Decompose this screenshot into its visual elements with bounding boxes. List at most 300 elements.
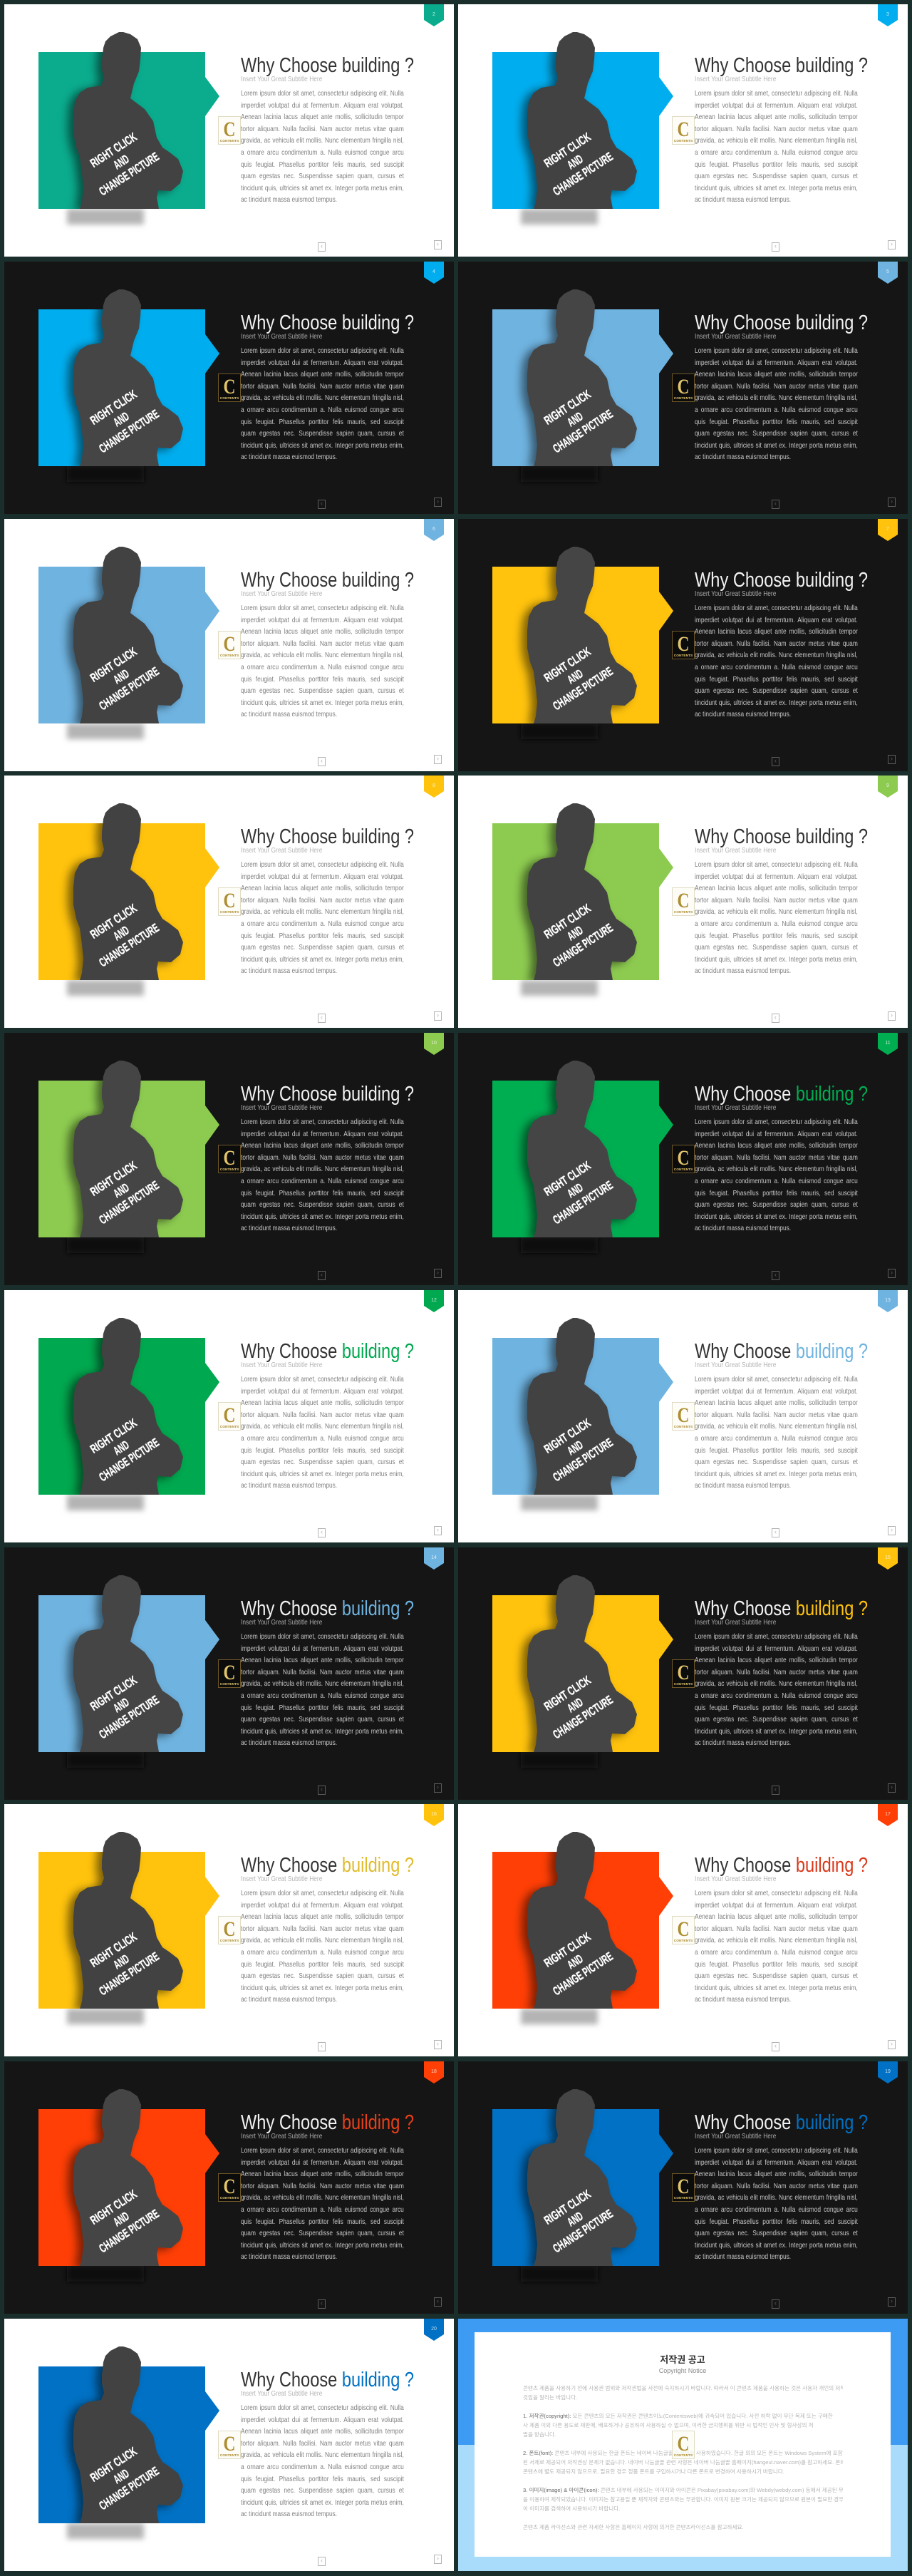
next button <box>888 240 896 249</box>
body text: Lorem ipsum dolor sit amet, consectetur adipiscing elit. Nulla <box>241 2404 404 2412</box>
image placeholder <box>492 803 673 999</box>
page tab <box>878 1290 898 1312</box>
page tab <box>424 1547 444 1570</box>
body text: ac tincidunt massa euismod tempus. <box>695 453 791 461</box>
image placeholder <box>492 1832 673 2027</box>
notice subheading: Copyright Notice <box>659 2367 706 2374</box>
logo: CONTENTS <box>674 911 693 915</box>
logo <box>672 1402 695 1431</box>
image placeholder: RIGHT CLICK <box>88 901 140 942</box>
logo: CONTENTS <box>674 1683 693 1686</box>
notice text <box>523 2384 843 2533</box>
next button <box>888 1526 896 1535</box>
body text: quis feugiat. Phasellus porttitor felis mauris, sed suscipit <box>695 1704 858 1712</box>
panel: slide 17 <box>458 1804 908 2056</box>
body text: gravida, ac vehicula elit mollis. Nunc elementum fringilla nisl, <box>695 1165 858 1173</box>
next button: › <box>437 2555 439 2562</box>
previous button: ‹ <box>774 1528 777 1535</box>
subtitle: Insert Your Great Subtitle Here <box>695 1875 776 1883</box>
image placeholder: AND <box>111 1438 132 1458</box>
body text: tortor aliquam. Nulla facilisi. Nam auctor metus vitae quam <box>241 1669 404 1676</box>
body text <box>241 90 404 204</box>
subtitle: Insert Your Great Subtitle Here <box>241 2390 322 2398</box>
image placeholder <box>38 1061 219 1254</box>
body text: gravida, ac vehicula elit mollis. Nunc elementum fringilla nisl, <box>241 137 404 145</box>
body text: quis feugiat. Phasellus porttitor felis mauris, sed suscipit <box>241 2475 404 2483</box>
previous button: ‹ <box>774 500 777 507</box>
image placeholder <box>38 1318 219 1514</box>
next button: › <box>437 755 439 762</box>
next button: › <box>437 1783 439 1791</box>
next button: › <box>437 1269 439 1276</box>
logo: C <box>678 889 689 912</box>
logo: CONTENTS <box>220 1426 239 1429</box>
logo <box>672 1916 695 1944</box>
page tab: 16 <box>431 1812 437 1817</box>
notice text: 2. 폰트(font): 콘텐츠 내부에 사용되는 한글 폰트는 네이버 나눔글꼴과 서체를 사용하였습니다. 한글 외의 모든 폰트는 Windows System에 포함 <box>523 2450 843 2456</box>
page tab: 12 <box>431 1298 437 1303</box>
title: Why Choose building ? <box>241 825 414 848</box>
body text: quis feugiat. Phasellus porttitor felis mauris, sed suscipit <box>695 418 858 426</box>
notice text: 콘텐츠 제품 라이선스와 관련 자세한 사항은 홈페이지 사항에 의거한 콘텐츠라이선스를 참고하세요. <box>523 2524 744 2530</box>
panel: slide 19 <box>458 2061 908 2314</box>
body text: Aenean lacinia lacus aliquet ante mollis, sollicitudin tempor <box>695 113 858 121</box>
title: Why Choose building ? <box>241 1597 414 1620</box>
body text: imperdiet volutpat dui at fermentum. Aliquam erat volutpat. <box>695 1902 858 1910</box>
logo: C <box>224 2175 235 2198</box>
body text: a ornare arcu condimentum a. Nulla euismod congue arcu <box>241 920 404 928</box>
body text: quam egestas nec. Suspendisse sapien quam, cursus et <box>241 1201 404 1209</box>
body text: gravida, ac vehicula elit mollis. Nunc elementum fringilla nisl, <box>241 394 404 402</box>
body text: quam egestas nec. Suspendisse sapien quam, cursus et <box>695 1972 858 1980</box>
body text: quam egestas nec. Suspendisse sapien quam, cursus et <box>241 687 404 695</box>
body text: tincidunt quis, ultricies sit amet ex. Integer porta metus enim, <box>241 2499 404 2507</box>
body text <box>241 1376 404 1490</box>
previous button: ‹ <box>321 242 323 249</box>
title: Why Choose building ? <box>695 54 868 77</box>
body text: quam egestas nec. Suspendisse sapien quam, cursus et <box>241 1972 404 1980</box>
image placeholder: RIGHT CLICK <box>542 901 594 942</box>
image placeholder: RIGHT CLICK <box>542 1930 594 1970</box>
page tab: 3 <box>886 12 889 17</box>
image placeholder: CHANGE PICTURE <box>97 1949 162 1998</box>
body text: Aenean lacinia lacus aliquet ante mollis, sollicitudin tempor <box>695 628 858 636</box>
page tab <box>424 2319 444 2341</box>
image placeholder: CHANGE PICTURE <box>97 1693 162 1741</box>
body text <box>695 1118 858 1232</box>
body text: Lorem ipsum dolor sit amet, consectetur adipiscing elit. Nulla <box>695 90 858 98</box>
page tab <box>878 1547 898 1570</box>
previous button: ‹ <box>774 242 777 249</box>
body text: quam egestas nec. Suspendisse sapien quam, cursus et <box>241 172 404 180</box>
lower background band <box>458 2445 908 2571</box>
body text: ac tincidunt massa euismod tempus. <box>695 967 791 975</box>
body text: a ornare arcu condimentum a. Nulla euismod congue arcu <box>241 1949 404 1957</box>
body text: ac tincidunt massa euismod tempus. <box>241 1482 337 1490</box>
body text: Lorem ipsum dolor sit amet, consectetur adipiscing elit. Nulla <box>695 1118 858 1126</box>
body text: tortor aliquam. Nulla facilisi. Nam auctor metus vitae quam <box>695 2183 858 2190</box>
body text <box>695 2147 858 2261</box>
title: Why Choose building ? <box>241 1854 414 1877</box>
next button <box>434 1011 442 1021</box>
image placeholder <box>38 803 219 999</box>
notice text: 콘텐츠에 별도 제공되지 않으므로, 필요한 경우 정품 폰트를 구입하시거나 다른 폰트로 변경하여 사용하시기 바랍니다. <box>523 2468 784 2475</box>
page tab: 9 <box>886 783 889 788</box>
body text: Lorem ipsum dolor sit amet, consectetur adipiscing elit. Nulla <box>695 1890 858 1897</box>
logo: CONTENTS <box>220 1168 239 1172</box>
body text: tincidunt quis, ultricies sit amet ex. Integer porta metus enim, <box>695 185 858 192</box>
logo <box>672 631 695 659</box>
panel: slide 18 <box>4 2061 454 2314</box>
body text: gravida, ac vehicula elit mollis. Nunc elementum fringilla nisl, <box>695 651 858 659</box>
page tab: 4 <box>432 269 435 274</box>
image placeholder: AND <box>111 409 132 429</box>
body text: tortor aliquam. Nulla facilisi. Nam auctor metus vitae quam <box>241 640 404 648</box>
body text: tortor aliquam. Nulla facilisi. Nam auctor metus vitae quam <box>695 1154 858 1162</box>
body text <box>241 1118 404 1232</box>
previous button: ‹ <box>321 500 323 507</box>
body text: quis feugiat. Phasellus porttitor felis mauris, sed suscipit <box>695 161 858 169</box>
page tab <box>878 2061 898 2083</box>
previous button: ‹ <box>774 1786 777 1793</box>
previous button <box>318 1528 326 1537</box>
title: Why Choose building ? <box>695 1083 868 1106</box>
previous button: ‹ <box>321 1786 323 1793</box>
page tab <box>424 519 444 541</box>
body text: quam egestas nec. Suspendisse sapien quam, cursus et <box>695 2230 858 2237</box>
body text: gravida, ac vehicula elit mollis. Nunc elementum fringilla nisl, <box>241 2451 404 2459</box>
body text: Aenean lacinia lacus aliquet ante mollis, sollicitudin tempor <box>695 1399 858 1407</box>
page tab <box>878 519 898 541</box>
image placeholder <box>492 32 673 228</box>
previous button <box>772 1014 779 1023</box>
body text: tincidunt quis, ultricies sit amet ex. Integer porta metus enim, <box>695 442 858 450</box>
body text: tortor aliquam. Nulla facilisi. Nam auctor metus vitae quam <box>695 1411 858 1419</box>
title: Why Choose building ? <box>695 1597 868 1620</box>
body text: a ornare arcu condimentum a. Nulla euismod congue arcu <box>695 920 858 928</box>
panel: slide 4 <box>4 262 454 514</box>
page tab: 20 <box>431 2327 437 2332</box>
body text: tincidunt quis, ultricies sit amet ex. Integer porta metus enim, <box>241 699 404 707</box>
body text: tincidunt quis, ultricies sit amet ex. Integer porta metus enim, <box>241 1213 404 1221</box>
image placeholder: AND <box>565 2209 586 2229</box>
image placeholder: AND <box>565 1180 586 1200</box>
body text: imperdiet volutpat dui at fermentum. Aliquam erat volutpat. <box>241 617 404 624</box>
page tab <box>424 4 444 26</box>
subtitle: Insert Your Great Subtitle Here <box>241 333 322 341</box>
body text: tincidunt quis, ultricies sit amet ex. Integer porta metus enim, <box>695 1470 858 1478</box>
body text: gravida, ac vehicula elit mollis. Nunc elementum fringilla nisl, <box>241 908 404 916</box>
next button <box>434 2297 442 2307</box>
image placeholder: CHANGE PICTURE <box>97 1178 162 1227</box>
previous button: ‹ <box>321 2042 323 2049</box>
body text: gravida, ac vehicula elit mollis. Nunc elementum fringilla nisl, <box>695 1423 858 1431</box>
previous button <box>318 2042 326 2051</box>
previous button <box>318 242 326 252</box>
body text: a ornare arcu condimentum a. Nulla euismod congue arcu <box>695 1435 858 1443</box>
image placeholder: CHANGE PICTURE <box>551 921 616 969</box>
body text: Lorem ipsum dolor sit amet, consectetur adipiscing elit. Nulla <box>241 90 404 98</box>
image placeholder: CHANGE PICTURE <box>97 150 162 198</box>
image placeholder: CHANGE PICTURE <box>97 664 162 713</box>
body text: tincidunt quis, ultricies sit amet ex. Integer porta metus enim, <box>241 442 404 450</box>
body text: gravida, ac vehicula elit mollis. Nunc elementum fringilla nisl, <box>241 2194 404 2202</box>
title: Why Choose building ? <box>695 311 868 334</box>
image placeholder <box>492 2089 673 2282</box>
previous button <box>318 1271 326 1280</box>
body text: tortor aliquam. Nulla facilisi. Nam auctor metus vitae quam <box>241 1154 404 1162</box>
logo <box>218 1145 241 1173</box>
image placeholder: RIGHT CLICK <box>88 130 140 170</box>
image placeholder: AND <box>111 2466 132 2486</box>
title: Why Choose building ? <box>241 311 414 334</box>
next button <box>888 2040 896 2049</box>
panel: slide 9 <box>458 776 908 1028</box>
image placeholder: AND <box>565 409 586 429</box>
subtitle: Insert Your Great Subtitle Here <box>695 1361 776 1369</box>
previous button: ‹ <box>774 1014 777 1021</box>
body text: gravida, ac vehicula elit mollis. Nunc elementum fringilla nisl, <box>241 1680 404 1688</box>
subtitle: Insert Your Great Subtitle Here <box>241 1619 322 1627</box>
body text: Aenean lacinia lacus aliquet ante mollis, sollicitudin tempor <box>695 2170 858 2178</box>
panel: slide 15 <box>458 1547 908 1800</box>
subtitle: Insert Your Great Subtitle Here <box>241 1104 322 1112</box>
body text: a ornare arcu condimentum a. Nulla euismod congue arcu <box>695 1949 858 1957</box>
panel: slide 7 <box>458 519 908 771</box>
body text: a ornare arcu condimentum a. Nulla euismod congue arcu <box>241 1435 404 1443</box>
image placeholder: RIGHT CLICK <box>542 644 594 685</box>
body text: imperdiet volutpat dui at fermentum. Aliquam erat volutpat. <box>241 2416 404 2424</box>
image placeholder: AND <box>565 152 586 172</box>
body text: quam egestas nec. Suspendisse sapien quam, cursus et <box>695 687 858 695</box>
body text <box>241 2147 404 2261</box>
image placeholder <box>38 32 219 228</box>
body text: a ornare arcu condimentum a. Nulla euismod congue arcu <box>695 406 858 414</box>
subtitle: Insert Your Great Subtitle Here <box>241 847 322 855</box>
previous button: ‹ <box>321 1271 323 1278</box>
page tab: 2 <box>432 12 435 17</box>
title: Why Choose building ? <box>695 2111 868 2134</box>
logo: C <box>678 1661 689 1684</box>
body text: a ornare arcu condimentum a. Nulla euismod congue arcu <box>241 1692 404 1700</box>
notice text: 된 서체로 제공되어 저작권상 문제가 없습니다. 네이버 나눔글꼴 관련 사항은 네이버 나눔글꼴 홈페이지(hangeul.naver.com)를 참고하세요. 폰트는 <box>523 2459 843 2466</box>
body text: quis feugiat. Phasellus porttitor felis mauris, sed suscipit <box>695 2218 858 2226</box>
logo <box>218 1402 241 1431</box>
image placeholder: RIGHT CLICK <box>88 1930 140 1970</box>
body text: a ornare arcu condimentum a. Nulla euismod congue arcu <box>695 1178 858 1185</box>
image placeholder: RIGHT CLICK <box>542 2187 594 2227</box>
image placeholder: AND <box>111 1695 132 1715</box>
previous button <box>318 2557 326 2566</box>
image placeholder: CHANGE PICTURE <box>551 407 616 455</box>
logo: CONTENTS <box>220 654 239 658</box>
body text: tincidunt quis, ultricies sit amet ex. Integer porta metus enim, <box>241 1984 404 1992</box>
image placeholder: AND <box>565 666 586 686</box>
body text: Lorem ipsum dolor sit amet, consectetur adipiscing elit. Nulla <box>241 604 404 612</box>
panel: slide 16 <box>4 1804 454 2056</box>
page tab: 18 <box>431 2069 437 2074</box>
body text: tortor aliquam. Nulla facilisi. Nam auctor metus vitae quam <box>695 383 858 391</box>
body text: tincidunt quis, ultricies sit amet ex. Integer porta metus enim, <box>695 699 858 707</box>
next button <box>888 498 896 507</box>
previous button <box>318 2299 326 2309</box>
body text: Lorem ipsum dolor sit amet, consectetur adipiscing elit. Nulla <box>695 604 858 612</box>
body text: ac tincidunt massa euismod tempus. <box>241 711 337 718</box>
body text: a ornare arcu condimentum a. Nulla euismod congue arcu <box>241 664 404 671</box>
panel: slide 13 <box>458 1290 908 1542</box>
body text: Lorem ipsum dolor sit amet, consectetur adipiscing elit. Nulla <box>241 2147 404 2155</box>
body text: Aenean lacinia lacus aliquet ante mollis, sollicitudin tempor <box>695 1142 858 1150</box>
page tab <box>878 1033 898 1055</box>
body text: ac tincidunt massa euismod tempus. <box>695 1739 791 1747</box>
logo <box>672 1659 695 1688</box>
image placeholder <box>492 1575 673 1768</box>
image placeholder <box>38 289 219 483</box>
logo: CONTENTS <box>220 911 239 915</box>
body text: Lorem ipsum dolor sit amet, consectetur adipiscing elit. Nulla <box>241 1118 404 1126</box>
title: Why Choose building ? <box>695 1340 868 1363</box>
previous button <box>772 2299 779 2309</box>
next button: › <box>891 1526 893 1533</box>
body text <box>695 604 858 718</box>
image placeholder: CHANGE PICTURE <box>97 2207 162 2255</box>
next button <box>888 1269 896 1278</box>
image placeholder: AND <box>565 1438 586 1458</box>
image placeholder: RIGHT CLICK <box>542 1158 594 1199</box>
image placeholder: AND <box>111 2209 132 2229</box>
body text <box>695 1376 858 1490</box>
logo: C <box>224 375 235 398</box>
previous button <box>772 1786 779 1795</box>
title: Why Choose building ? <box>241 2111 414 2134</box>
body text: ac tincidunt massa euismod tempus. <box>695 1225 791 1232</box>
body text: a ornare arcu condimentum a. Nulla euismod congue arcu <box>241 2206 404 2214</box>
image placeholder: RIGHT CLICK <box>542 387 594 428</box>
body text: imperdiet volutpat dui at fermentum. Aliquam erat volutpat. <box>695 873 858 881</box>
logo: CONTENTS <box>220 2197 239 2200</box>
notice heading: 저작권 공고 <box>660 2354 705 2365</box>
body text: Lorem ipsum dolor sit amet, consectetur adipiscing elit. Nulla <box>695 347 858 355</box>
body text: quam egestas nec. Suspendisse sapien quam, cursus et <box>241 430 404 438</box>
logo <box>672 116 695 145</box>
body text: imperdiet volutpat dui at fermentum. Aliquam erat volutpat. <box>695 1388 858 1396</box>
body text: imperdiet volutpat dui at fermentum. Aliquam erat volutpat. <box>241 1902 404 1910</box>
page tab: 13 <box>885 1298 891 1303</box>
body text: quam egestas nec. Suspendisse sapien quam, cursus et <box>695 430 858 438</box>
body text: quam egestas nec. Suspendisse sapien quam, cursus et <box>695 172 858 180</box>
previous button <box>318 500 326 509</box>
image placeholder: AND <box>565 1695 586 1715</box>
logo: CONTENTS <box>220 2454 239 2458</box>
body text: ac tincidunt massa euismod tempus. <box>241 196 337 204</box>
body text <box>695 90 858 204</box>
logo <box>672 2431 695 2459</box>
logo: CONTENTS <box>674 1426 693 1429</box>
body text: Lorem ipsum dolor sit amet, consectetur adipiscing elit. Nulla <box>241 1890 404 1897</box>
logo: C <box>678 1403 689 1427</box>
body text: tincidunt quis, ultricies sit amet ex. Integer porta metus enim, <box>695 1984 858 1992</box>
previous button: ‹ <box>321 1528 323 1535</box>
body text: a ornare arcu condimentum a. Nulla euismod congue arcu <box>241 1178 404 1185</box>
logo: CONTENTS <box>220 140 239 143</box>
next button: › <box>437 1011 439 1019</box>
page tab: 8 <box>432 783 435 788</box>
body text: tincidunt quis, ultricies sit amet ex. Integer porta metus enim, <box>241 1728 404 1736</box>
body text: tincidunt quis, ultricies sit amet ex. Integer porta metus enim, <box>241 185 404 192</box>
logo: CONTENTS <box>220 397 239 401</box>
image placeholder: CHANGE PICTURE <box>551 1949 616 1998</box>
title: Why Choose building ? <box>241 569 414 592</box>
logo <box>218 373 241 402</box>
body text: ac tincidunt massa euismod tempus. <box>241 453 337 461</box>
body text: tortor aliquam. Nulla facilisi. Nam auctor metus vitae quam <box>695 1925 858 1933</box>
body text: quis feugiat. Phasellus porttitor felis mauris, sed suscipit <box>241 1190 404 1197</box>
notice card <box>475 2332 891 2557</box>
panel: slide 2 <box>4 4 454 257</box>
logo: CONTENTS <box>674 654 693 658</box>
subtitle: Insert Your Great Subtitle Here <box>695 1619 776 1627</box>
panel: slide 5 <box>458 262 908 514</box>
body text: ac tincidunt massa euismod tempus. <box>695 711 791 718</box>
body text: a ornare arcu condimentum a. Nulla euismod congue arcu <box>695 664 858 671</box>
body text: quis feugiat. Phasellus porttitor felis mauris, sed suscipit <box>241 1704 404 1712</box>
body text: ac tincidunt massa euismod tempus. <box>241 1996 337 2004</box>
subtitle: Insert Your Great Subtitle Here <box>241 1875 322 1883</box>
body text: quis feugiat. Phasellus porttitor felis mauris, sed suscipit <box>695 1447 858 1455</box>
logo <box>218 887 241 916</box>
image placeholder: RIGHT CLICK <box>88 644 140 685</box>
body text: imperdiet volutpat dui at fermentum. Aliquam erat volutpat. <box>695 1645 858 1653</box>
body text: Aenean lacinia lacus aliquet ante mollis, sollicitudin tempor <box>241 628 404 636</box>
body text: ac tincidunt massa euismod tempus. <box>241 2253 337 2261</box>
image placeholder: AND <box>111 1180 132 1200</box>
page tab: 6 <box>432 527 435 532</box>
logo <box>672 1145 695 1173</box>
next button <box>888 2297 896 2307</box>
body text: Aenean lacinia lacus aliquet ante mollis, sollicitudin tempor <box>241 2428 404 2436</box>
image placeholder: CHANGE PICTURE <box>551 1436 616 1484</box>
previous button: ‹ <box>774 2042 777 2049</box>
subtitle: Insert Your Great Subtitle Here <box>695 333 776 341</box>
logo: C <box>678 375 689 398</box>
body text: tincidunt quis, ultricies sit amet ex. Integer porta metus enim, <box>241 2242 404 2250</box>
next button: › <box>891 1783 893 1791</box>
body text <box>241 861 404 975</box>
notice text: 1. 저작권(copyright): 모든 콘텐츠의 모든 저작권은 콘텐츠이노(Contentsweb)에 귀속되어 있습니다. 사전 허락 없이 무단 복제 또는 구매한 <box>523 2413 833 2419</box>
page tab: 19 <box>885 2069 891 2074</box>
image placeholder <box>492 1061 673 1254</box>
previous button: ‹ <box>321 757 323 764</box>
body text: a ornare arcu condimentum a. Nulla euismod congue arcu <box>241 2463 404 2471</box>
body text: gravida, ac vehicula elit mollis. Nunc elementum fringilla nisl, <box>695 394 858 402</box>
next button <box>434 1526 442 1535</box>
body text: tincidunt quis, ultricies sit amet ex. Integer porta metus enim, <box>695 956 858 964</box>
logo <box>672 2173 695 2202</box>
page tab <box>878 262 898 284</box>
image placeholder <box>492 289 673 483</box>
body text: tincidunt quis, ultricies sit amet ex. Integer porta metus enim, <box>241 1470 404 1478</box>
body text: ac tincidunt massa euismod tempus. <box>695 196 791 204</box>
body text: tortor aliquam. Nulla facilisi. Nam auctor metus vitae quam <box>241 125 404 133</box>
body text: a ornare arcu condimentum a. Nulla euismod congue arcu <box>241 406 404 414</box>
next button <box>888 755 896 764</box>
body text: quam egestas nec. Suspendisse sapien quam, cursus et <box>695 944 858 952</box>
previous button: ‹ <box>321 2557 323 2564</box>
body text: quam egestas nec. Suspendisse sapien quam, cursus et <box>695 1458 858 1466</box>
body text <box>241 347 404 461</box>
next button <box>434 2040 442 2049</box>
notice text: 벌을 받습니다. <box>523 2431 556 2438</box>
